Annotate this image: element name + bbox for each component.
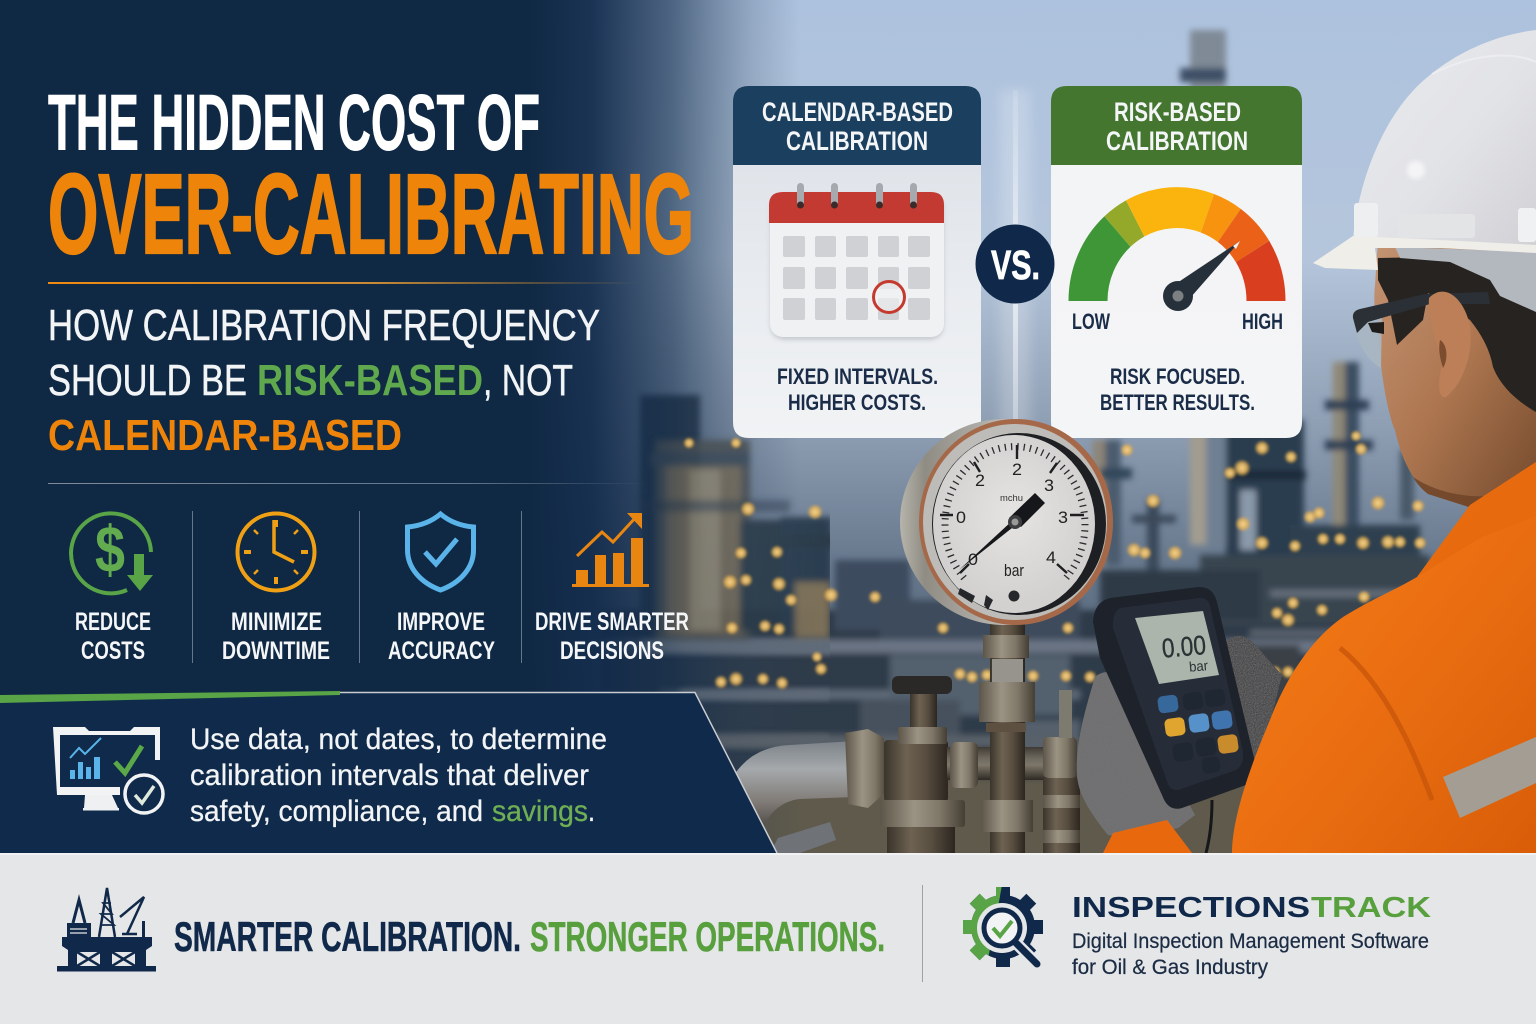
icon: offshore rig [57,888,156,972]
callout text: calibration intervals that deliver [190,759,589,792]
gauge numbers: 0 [956,508,966,527]
logo: gear and magnifier [963,887,1043,967]
label: ACCURACY [388,637,495,665]
gauge numbers: 2 [975,471,985,490]
large pipe [716,741,855,853]
icon: rising bar chart [572,513,649,587]
card caption: FIXED INTERVALS. [777,364,938,389]
subtitle: CALENDAR-BASED [48,411,402,460]
benefit: improve accuracy [388,514,495,665]
gauge unit: bar [1004,561,1024,580]
hard hat [1313,30,1536,270]
device keypad [1157,688,1239,774]
gauge needle [1163,241,1240,311]
gauge numbers: 0 [968,550,978,569]
subtitle: RISK-BASED [257,356,483,405]
vertical gauge stem [979,620,1035,853]
card body [733,150,981,438]
logo tagline: for Oil & Gas Industry [1072,956,1268,979]
navy left fade overlay [0,0,800,860]
label: IMPROVE [397,608,485,636]
card body [1051,150,1302,438]
card caption: HIGHER COSTS. [788,390,926,415]
subtitle [48,301,600,460]
gauge face [933,435,1095,613]
icon: clock [238,514,314,590]
coat cuff [1103,820,1192,853]
gauge scale labels: LOW [1072,309,1110,334]
gauge brand mark: mchu [1000,493,1023,503]
benefit: reduce costs [71,512,153,665]
horizontal pipe with flanges [947,690,1080,853]
logo wordmark: INSPECTIONS [1072,892,1310,924]
grey rule [48,483,648,484]
worker neck and face [1374,240,1536,508]
coverall sleeve seam [1340,648,1432,800]
callout text: savings [492,795,588,828]
title highlight: OVER-CALIBRATING [48,151,694,277]
calendar-based card [733,86,981,438]
callout text: Use data, not dates, to determine [190,723,607,756]
label [388,608,495,665]
worker jaw shadow [1413,477,1490,508]
label: DRIVE SMARTER [535,608,689,636]
title: THE HIDDEN COST OF [48,78,540,166]
device screen [1135,611,1219,684]
device body [1093,587,1256,809]
logo wordmark: TRACK [1311,892,1431,924]
card caption [777,364,938,415]
device unit: bar [1188,657,1209,675]
safety glasses [1353,292,1490,368]
worker ear [1429,292,1471,397]
pipe nut [845,729,888,808]
refinery lights [683,430,1427,690]
gauge case [900,419,1108,625]
label: MINIMIZE [231,608,322,636]
valve body and lower flange [880,676,965,853]
green accent [0,691,340,703]
gauge numbers [956,460,1068,569]
gauge numbers: 2 [1012,460,1022,479]
card heading: CALIBRATION [786,126,928,156]
subtitle: HOW CALIBRATION FREQUENCY [48,301,600,350]
pressure gauge [900,419,1113,625]
label: REDUCE [75,608,151,636]
label: COSTS [81,637,145,665]
icon: dollar with down arrow: $ [95,512,125,586]
orange rule [48,282,638,284]
card header [1051,86,1302,165]
centre glow between cards [1000,90,1030,430]
label: DECISIONS [560,637,664,665]
card header [733,86,981,165]
gauge scale labels [1072,309,1283,334]
card heading: RISK-BASED [1114,97,1241,127]
gauge needle [959,493,1045,570]
gauge scale labels: HIGH [1242,309,1283,334]
footer band [0,853,1536,1024]
gauge ticks [945,447,1085,578]
subtitle: SHOULD BE [48,356,247,405]
photo: left glove [1077,672,1195,836]
footer tagline: STRONGER OPERATIONS. [530,913,885,960]
logo wordmark [1072,892,1431,924]
callout text: safety, compliance, and [190,795,483,828]
label [75,608,151,665]
card heading [762,97,953,156]
callout text: . [588,795,595,828]
risk gauge [1088,208,1266,301]
label: DOWNTIME [222,637,330,665]
photo: pipework and valve [716,620,1080,853]
device reading: 0.00 [1161,630,1207,664]
label [535,608,689,665]
benefit: drive smarter decisions [535,513,689,665]
footer tagline: SMARTER CALIBRATION. [174,913,521,960]
card heading: CALIBRATION [1106,126,1248,156]
hard hat suspension [1395,247,1536,312]
label [222,608,330,665]
title [48,78,694,277]
gauge numbers: 3 [1058,508,1068,527]
card heading: CALENDAR-BASED [762,97,953,127]
risk-based card [1051,86,1302,438]
worker hair [1378,255,1536,412]
icon: calendar [769,183,944,340]
gauge numbers: 3 [1044,476,1054,495]
logo tagline: Digital Inspection Management Software [1072,930,1429,953]
device cable [1206,800,1212,853]
coverall collar [1417,462,1536,577]
benefit: minimize downtime [222,514,330,665]
handheld calibrator [1093,587,1256,853]
background: blurred refinery [600,30,1536,860]
versus badge: VS. [991,242,1040,288]
orange coverall [1232,462,1536,853]
card caption: RISK FOCUSED. [1110,364,1245,389]
callout text [190,723,607,828]
worker [1232,30,1536,853]
background: refinery tower near fade [640,440,848,747]
card caption [1100,364,1255,415]
icon: dollar with down arrow [71,512,153,593]
versus badge [976,90,1054,425]
icon: monitor with check [53,727,163,813]
reflective strip [1443,737,1536,818]
card heading [1106,97,1248,156]
photo: right glove [1226,636,1282,790]
subtitle: , NOT [483,356,573,405]
logo tagline [1072,930,1429,979]
gauge numbers: 4 [1046,548,1056,567]
panel shape [0,693,777,853]
icon: shield [408,514,474,590]
callout panel [0,691,777,853]
card caption: BETTER RESULTS. [1100,390,1255,415]
